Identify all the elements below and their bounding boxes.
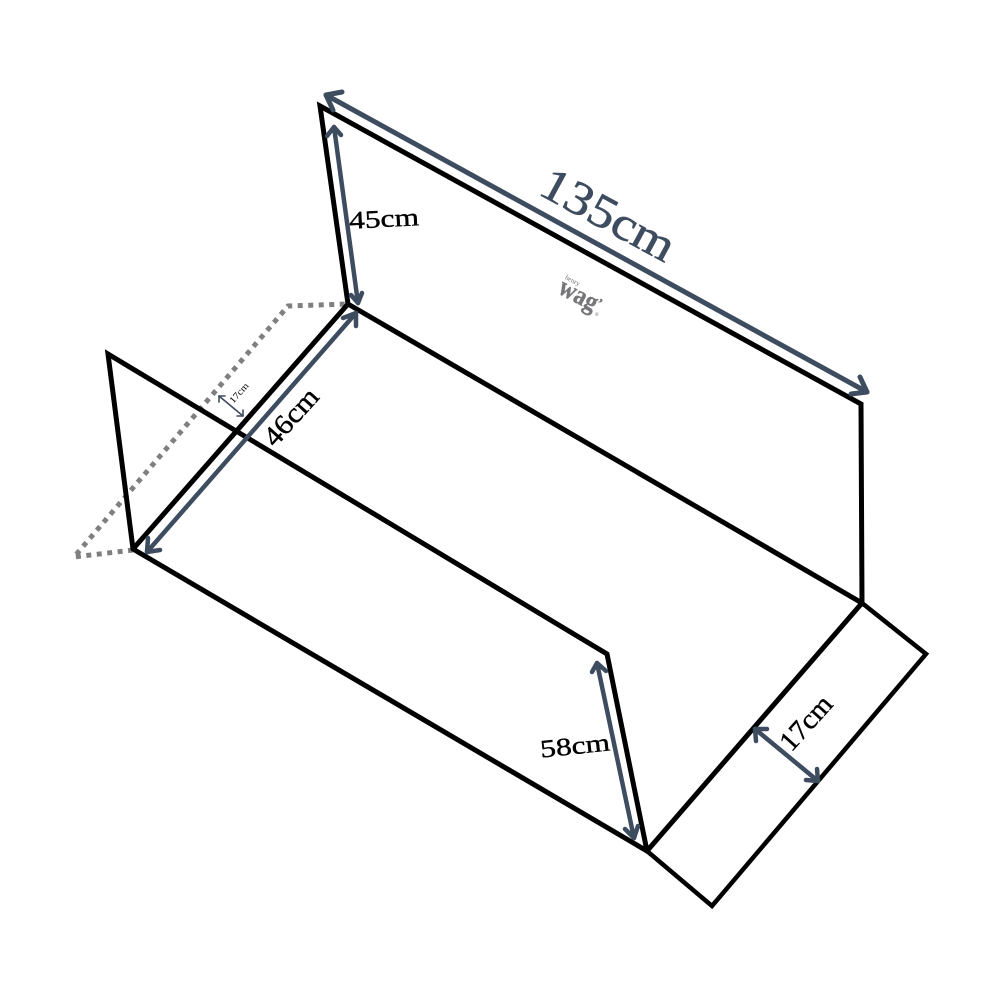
arrow: small 17cm [219,396,243,416]
logo: henry wag: ® [593,310,600,318]
label: small 17cm: 17cm [228,381,252,406]
arrow: 135cm width [326,92,867,394]
logo: henry wag: ’ [593,297,604,312]
label: 58cm: 58cm [539,729,612,764]
label: 46cm: 46cm [257,382,326,453]
back panel [320,106,862,603]
front flap [647,603,926,906]
dotted outline: hidden flap [74,304,348,557]
arrow: 17cm flap [755,729,818,781]
label: 135cm: 135cm [531,157,685,273]
base edges [133,304,862,851]
logo: henry wag: wag [554,271,604,317]
label: 45cm: 45cm [348,204,420,235]
front panel [108,354,647,851]
arrow: 45cm height [327,127,362,303]
logo: henry wag: henry [564,273,582,288]
arrow: 58cm height [592,663,638,838]
arrow: 46cm depth [147,313,356,552]
label: 17cm flap: 17cm [773,689,839,757]
